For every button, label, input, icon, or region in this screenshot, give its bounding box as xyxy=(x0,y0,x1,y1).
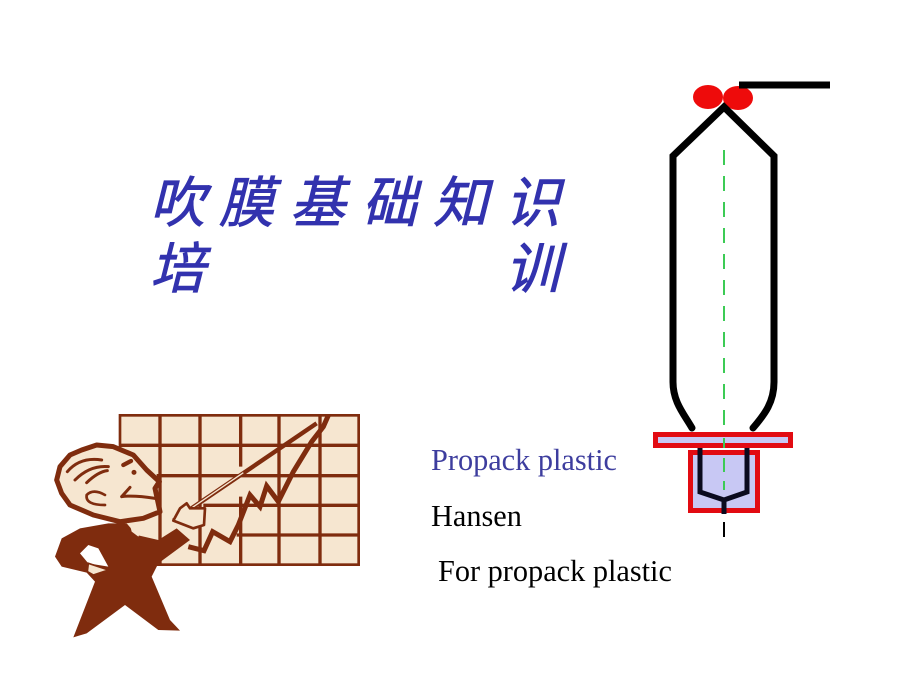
pointing hand xyxy=(173,503,205,528)
label: For propack plastic: For propack plastic xyxy=(438,554,672,588)
face details xyxy=(67,459,155,505)
chart board xyxy=(120,415,359,565)
title xyxy=(150,172,568,300)
die channel xyxy=(700,448,747,514)
centre line in die xyxy=(723,438,725,490)
hand at hip xyxy=(87,563,108,575)
air ring xyxy=(656,434,790,446)
title: 训 xyxy=(505,238,568,300)
presenter head xyxy=(57,445,160,522)
label: Propack plastic: Propack plastic xyxy=(431,443,617,477)
nip rollers xyxy=(693,85,753,110)
illustration: presenter pointing at rising chart xyxy=(55,415,359,637)
label: Hansen: Hansen xyxy=(431,499,522,533)
title: 础 xyxy=(362,172,422,234)
shirt collar xyxy=(130,525,142,537)
film take-off line xyxy=(739,82,830,88)
title: 吹 xyxy=(150,172,212,234)
arm gap xyxy=(80,545,108,567)
title: 培 xyxy=(150,238,212,300)
title: 基 xyxy=(290,172,351,234)
title: 膜 xyxy=(219,172,282,234)
lower axis xyxy=(723,522,725,537)
bubble outline xyxy=(673,107,774,428)
presenter body xyxy=(55,523,190,637)
chart trend line xyxy=(188,415,328,551)
title: 知 xyxy=(433,172,494,234)
pointer stick xyxy=(173,423,317,521)
die box xyxy=(690,452,758,510)
title: 识 xyxy=(505,172,565,234)
centre line xyxy=(723,150,725,432)
diagram: blown film bubble xyxy=(656,85,830,537)
